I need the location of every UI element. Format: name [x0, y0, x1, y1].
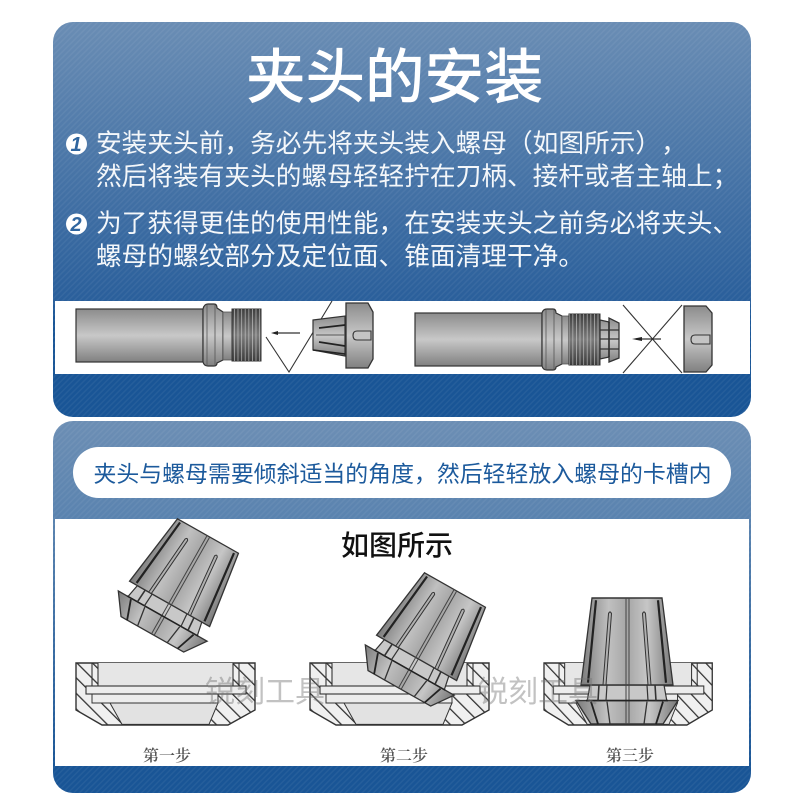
arrow	[632, 337, 661, 341]
step 2 diagram	[310, 565, 499, 766]
icon: number 1 badge: 1	[70, 134, 82, 156]
heading: as shown: 如图所示	[341, 530, 453, 561]
text block: step 1	[96, 129, 738, 191]
step 3 diagram	[544, 598, 712, 766]
icon: number 1 badge	[66, 134, 87, 156]
callout pill	[73, 447, 731, 498]
watermark	[205, 676, 598, 709]
text block: step 1: 然后将装有夹头的螺母轻轻拧在刀柄、接杆或者主轴上；	[96, 162, 738, 191]
collet nose	[600, 318, 619, 362]
callout pill: 夹头与螺母需要倾斜适当的角度，然后轻轻放入螺母的卡槽内	[94, 461, 712, 487]
step 1 label: 第一步	[143, 743, 191, 766]
arrow	[271, 331, 300, 335]
nut	[346, 303, 373, 368]
panel: installation instructions	[53, 22, 751, 417]
icon: number 2 badge: 2	[69, 214, 82, 236]
text block: step 2	[96, 209, 738, 271]
text block: step 2: 螺母的螺纹部分及定位面、锥面清理干净。	[96, 242, 584, 271]
nut	[684, 306, 712, 372]
collet	[313, 316, 345, 356]
diagram: correct assembly comparison	[415, 305, 712, 373]
watermark: 锐刻工具	[478, 676, 598, 709]
icon: number 2 badge	[66, 214, 87, 236]
title: 夹头的安装	[246, 44, 544, 111]
cross mark	[623, 305, 682, 373]
panel: assembly steps	[53, 421, 751, 793]
step 3 label: 第三步	[606, 743, 654, 766]
step 2 label: 第二步	[380, 743, 428, 766]
text block: step 2: 为了获得更佳的使用性能，在安装夹头之前务必将夹头、	[96, 209, 738, 238]
text block: step 1: 安装夹头前，务必先将夹头装入螺母（如图所示），	[96, 129, 687, 158]
panel: white diagram band	[55, 301, 750, 374]
step 1 diagram	[76, 511, 255, 766]
diagram: incorrect assembly, collet not in nut	[76, 301, 373, 372]
watermark: 锐刻工具	[205, 676, 325, 709]
